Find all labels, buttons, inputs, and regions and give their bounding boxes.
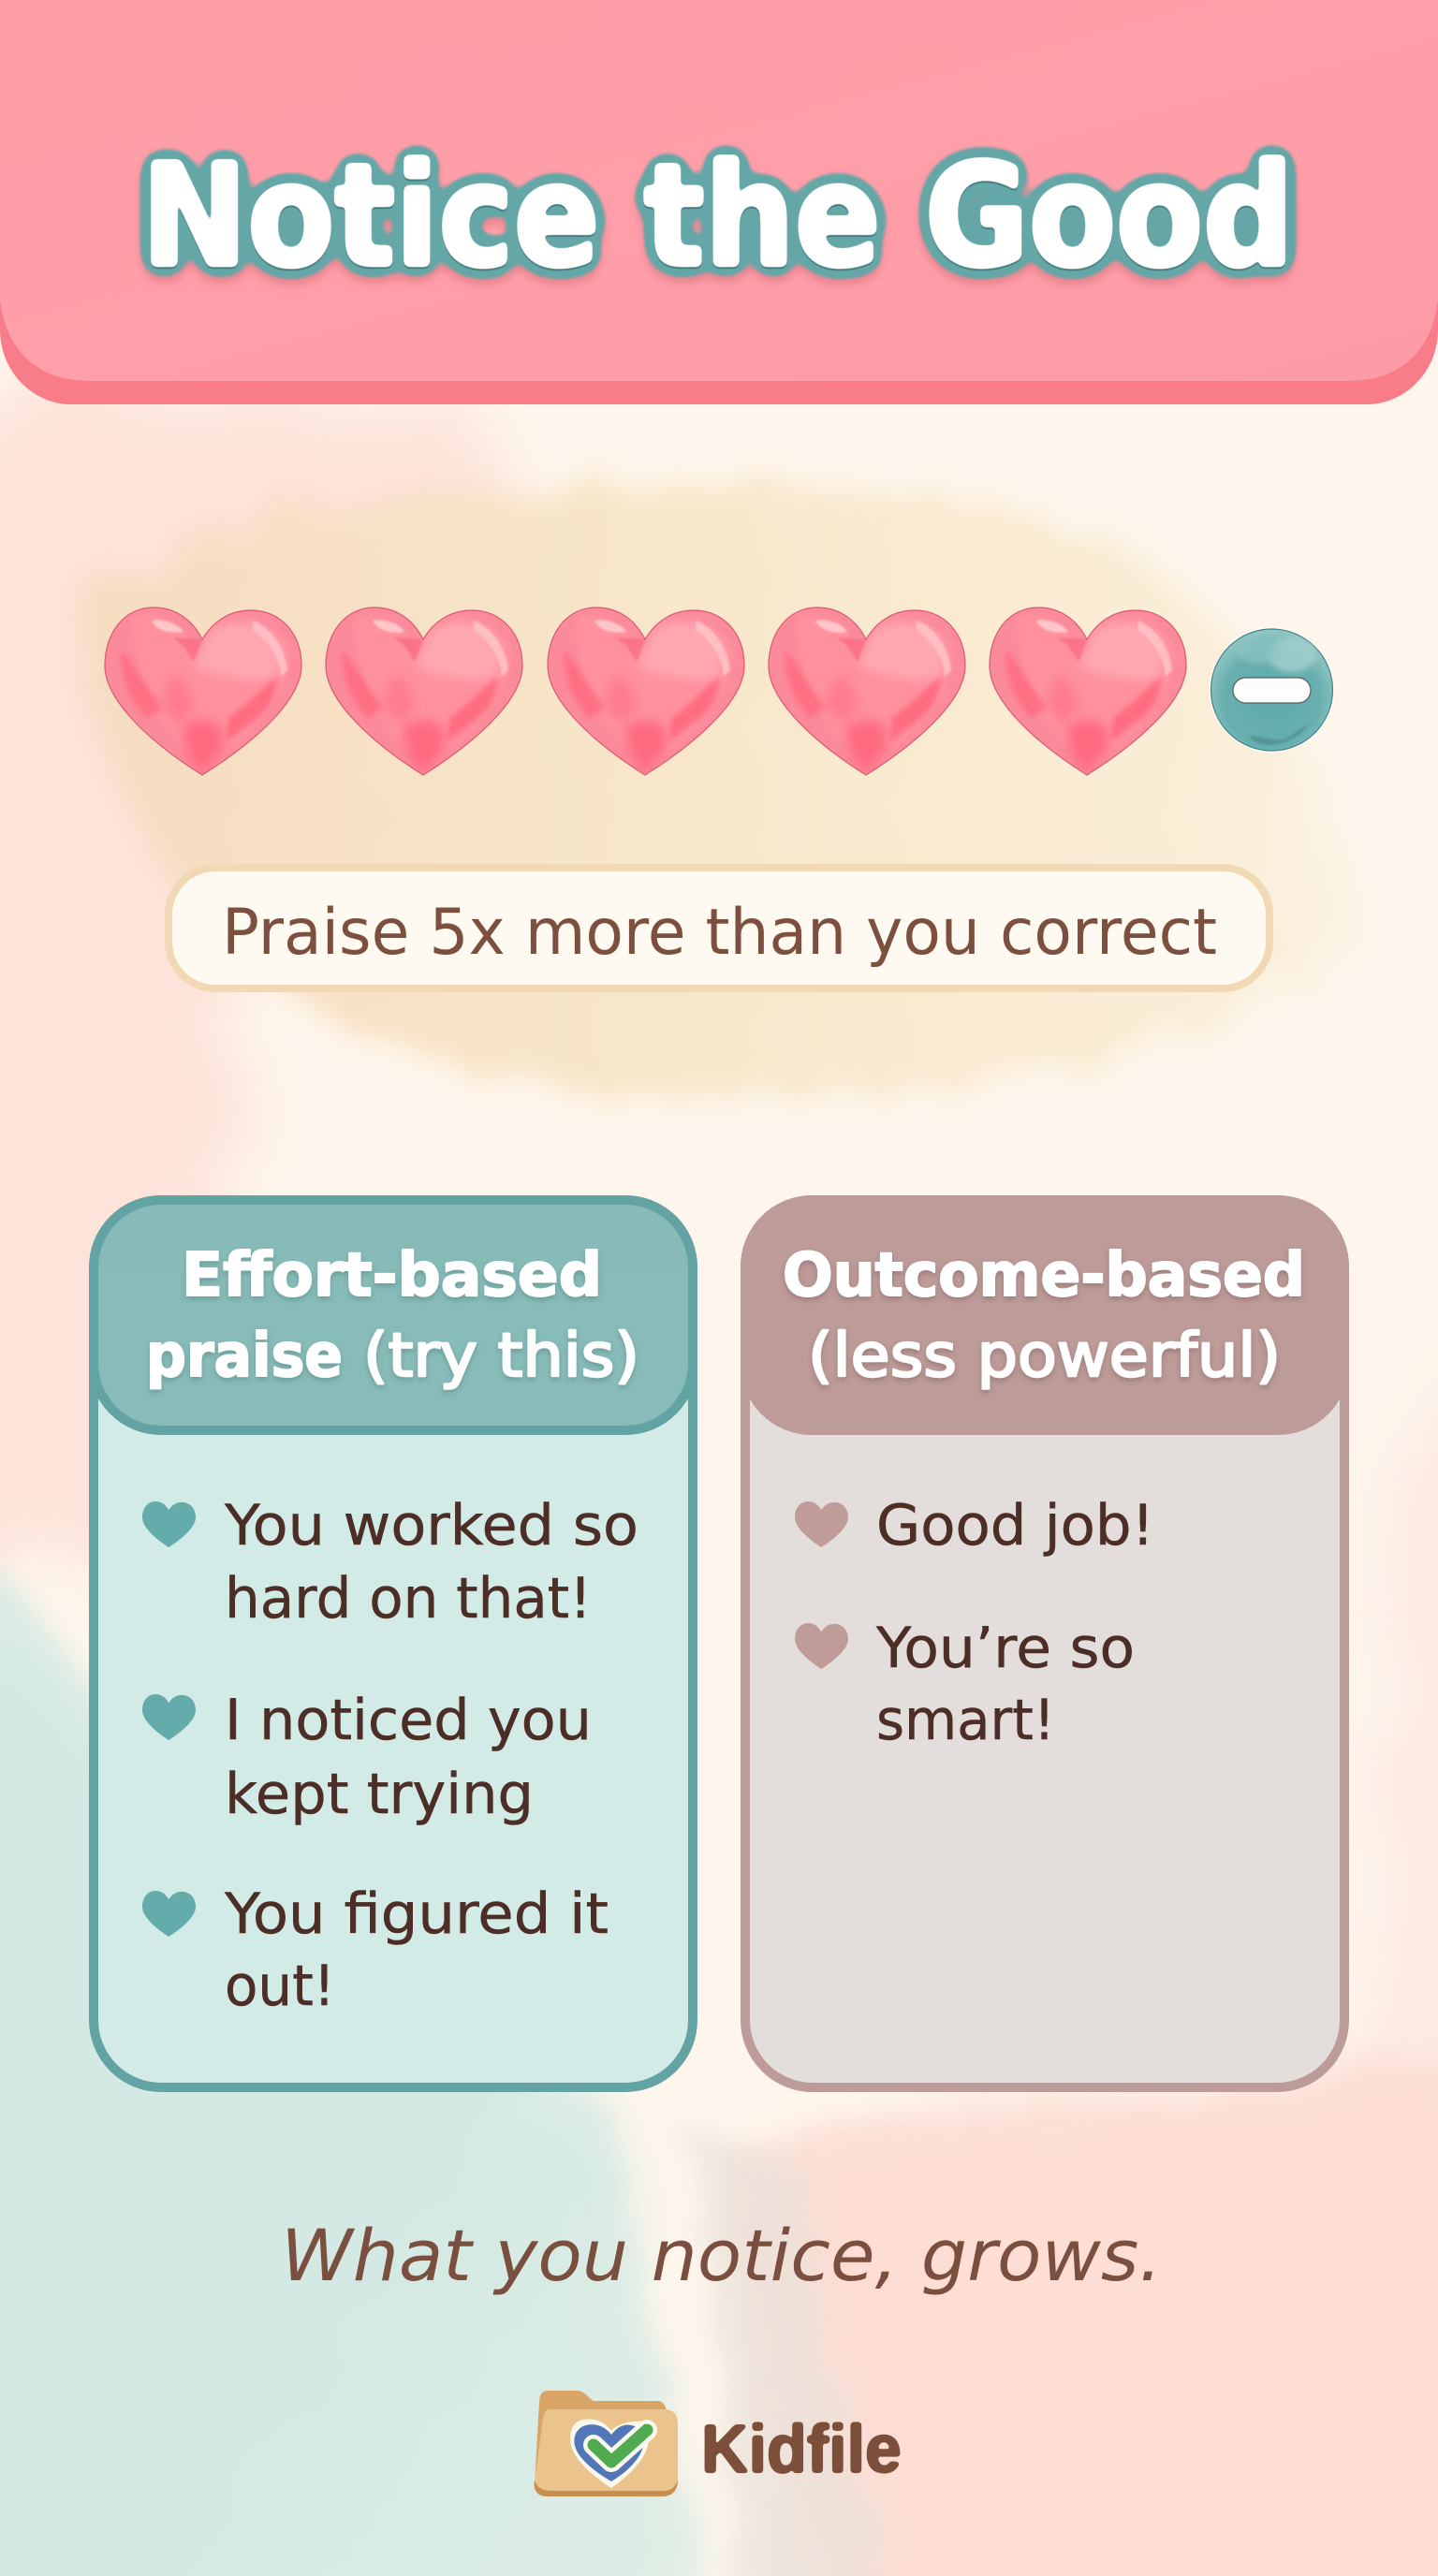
heading: effort-based: praise <box>146 1322 343 1391</box>
header banner <box>0 0 1438 404</box>
panel header: outcome-based <box>741 1195 1349 1435</box>
ratio pill <box>169 868 1269 988</box>
heading: effort-based: Effort-based <box>182 1241 602 1310</box>
list: effort phrases <box>142 1493 638 2019</box>
icon: minus circle <box>1210 627 1335 753</box>
text: you worked so hard <box>224 1493 638 1632</box>
icon: teal heart 1 <box>142 1501 196 1547</box>
ratio row: five hearts and a minus <box>105 607 1335 775</box>
icon: rose heart 2 <box>795 1623 848 1669</box>
text: you worked so hard: You worked so <box>224 1493 638 1559</box>
heading: outcome-based: (less powerful) <box>808 1322 1281 1391</box>
icon: teal heart 3 <box>142 1891 196 1937</box>
text: i noticed you kept trying: I noticed you <box>225 1688 592 1753</box>
heading: outcome-based: Outcome-based <box>783 1241 1305 1310</box>
list: outcome phrases <box>795 1493 1154 1753</box>
heading: effort-based: (try this) <box>363 1322 639 1391</box>
text: you're so smart: smart! <box>876 1688 1055 1753</box>
panel header: effort-based <box>94 1200 693 1430</box>
text: i noticed you kept trying: kept trying <box>225 1762 534 1827</box>
text: you figured it out <box>224 1881 609 2019</box>
icon: teal heart 2 <box>142 1694 196 1740</box>
icon: heart 3 <box>548 607 744 775</box>
tagline: What you notice, grows. <box>281 2214 1162 2297</box>
panel: outcome-based praise <box>741 1195 1349 2087</box>
heading: effort-based <box>146 1241 639 1391</box>
icon: heart 2 <box>326 607 522 775</box>
text: good job: Good job! <box>876 1493 1154 1559</box>
text: you're so smart: You’re so <box>875 1616 1135 1681</box>
icon: heart 1 <box>105 607 301 775</box>
icon: folder with heart and check <box>535 2391 678 2496</box>
title: Notice the Good <box>141 133 1294 299</box>
text: you worked so hard: hard on that! <box>225 1566 592 1632</box>
panel: effort-based praise <box>94 1200 693 2087</box>
text: i noticed you kept trying <box>225 1688 592 1827</box>
logo: Kidfile <box>535 2391 902 2496</box>
icon: heart 4 <box>769 607 965 775</box>
icon: rose heart 1 <box>795 1501 848 1547</box>
text: you figured it out: out! <box>225 1954 335 2019</box>
pill text: Praise 5x more than you correct <box>222 896 1217 970</box>
text: you're so smart <box>875 1616 1135 1753</box>
icon: heart 5 <box>990 607 1186 775</box>
heading: outcome-based <box>783 1241 1305 1391</box>
text: you figured it out: You figured it <box>224 1881 609 1947</box>
wordmark: Kidfile <box>701 2412 902 2487</box>
